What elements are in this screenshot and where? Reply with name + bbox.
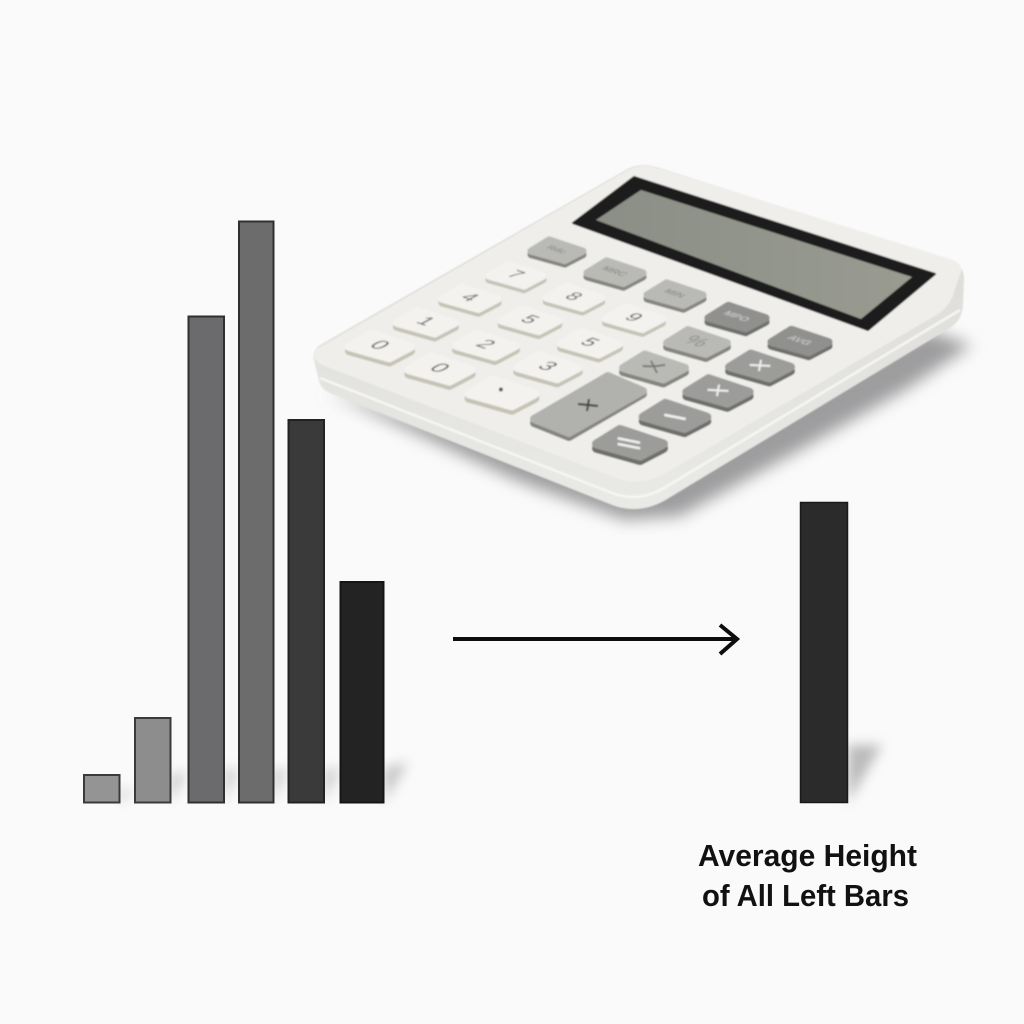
key: 9: 9 [619,311,648,324]
key: multiply [623,355,685,383]
key: plus upper [729,354,791,382]
key: 4 [442,287,498,313]
bar 1 [84,775,120,802]
key: 9 [606,307,662,333]
key: 0 left: 0 [364,337,396,352]
bar 3 [188,316,224,802]
key: 2: 2 [470,337,501,351]
key: 0 middle: 0 [424,360,457,375]
key: decimal point [469,380,535,410]
key: plus lower [686,378,750,408]
bar 4 [239,222,274,802]
bar 5 [288,420,324,802]
key: 1: 1 [411,315,440,328]
average label: of All Left Bars [702,878,909,913]
average bar shadow [848,745,882,803]
key: equals [596,429,664,461]
key: 0 middle [408,356,472,386]
bar 6 [340,582,384,802]
bar 2 [135,718,170,802]
key: 1 [397,310,455,338]
key: 4: 4 [455,291,484,304]
key: function 1 [531,240,583,264]
key: function 5 [771,330,829,356]
key: 0 left [349,334,411,362]
key: function 1: Rdc [544,244,570,255]
calculator display bezel [573,177,935,330]
average label [698,838,917,913]
icon: calculator [314,165,972,520]
key: 5 [502,309,558,335]
key: function 3 [647,283,703,309]
bar chart: left bars [84,222,408,803]
average label: Average Height [698,838,917,873]
key: 8 [546,286,602,312]
key: 6: 5 [575,336,604,349]
key: 3 [517,355,579,383]
key: 6 [561,331,619,359]
key: function 2: MRC [598,265,630,278]
key: function 2 [587,261,643,287]
key: 7: 7 [502,268,530,281]
key: function 5: AVG [784,335,814,347]
key: percent: % [678,333,715,350]
key: minus [643,403,707,433]
key: 3: 3 [532,359,563,373]
key: function 3: MIN [660,288,688,299]
key: 5: 5 [515,313,544,326]
calculator LCD screen [596,190,912,319]
key: 7 [489,264,543,290]
key: large plus [534,376,643,437]
key: 2 [456,333,516,361]
key: 8: 8 [559,290,587,303]
calculator shadow [326,330,972,520]
calculator top face [314,166,961,482]
key: function 4 [708,306,766,332]
bar shadows [120,762,408,803]
calculator body [314,165,964,509]
key: percent [667,330,727,358]
average bar [800,502,848,802]
arrow [453,625,737,654]
key: function 4: MPO [720,310,752,323]
